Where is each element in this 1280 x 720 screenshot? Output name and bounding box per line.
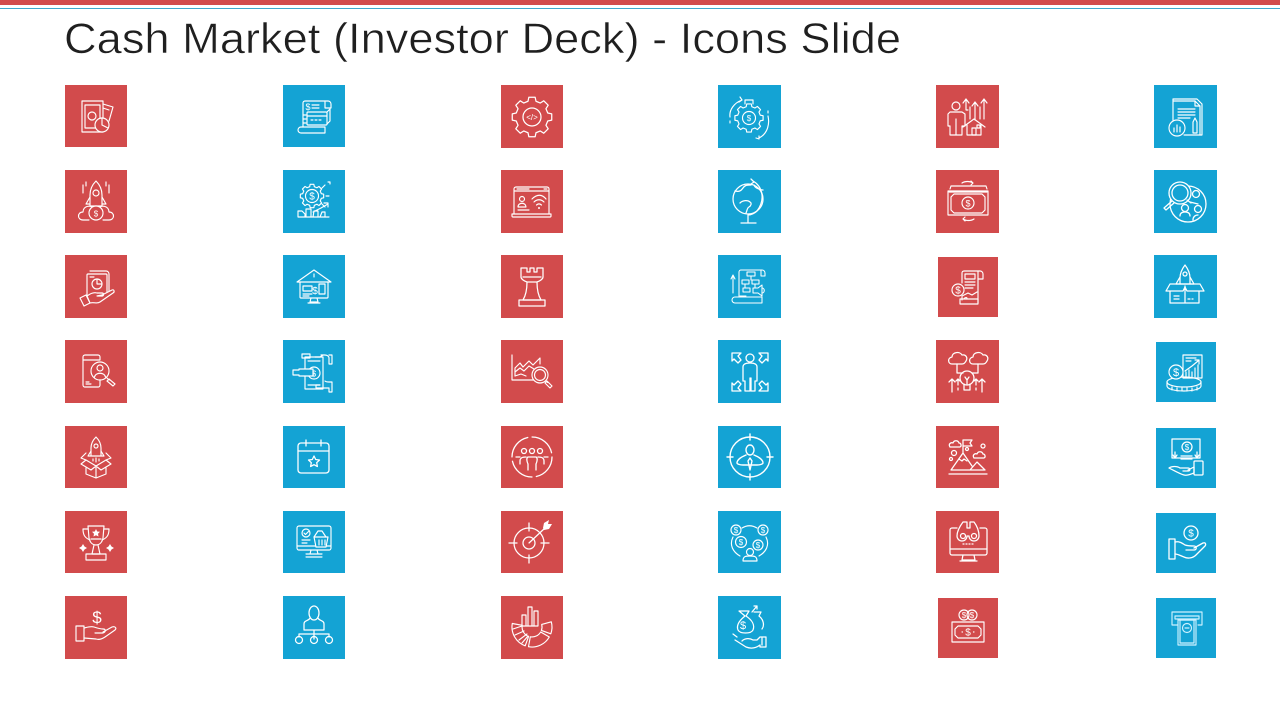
icon: cash with swap arrows: $ — [965, 198, 971, 208]
icon: cash bill with coins — [938, 598, 998, 658]
icon: hand receiving bill — [1156, 428, 1216, 488]
icon: team in circle — [501, 426, 563, 488]
icon: bank on monitor — [283, 255, 345, 318]
icon: globe on stand — [718, 170, 781, 233]
icon: hand holding report — [65, 255, 127, 318]
icon: document with chart badge — [1154, 85, 1217, 148]
icon: money bags on hand — [718, 596, 781, 659]
icon: hand with dollar — [65, 596, 127, 659]
icon: ATM cash slot — [1156, 598, 1216, 658]
icon: laptop with wifi — [501, 170, 563, 233]
icon: coins and person: $ — [734, 526, 739, 535]
icon: coins and person: $ — [739, 538, 744, 547]
icon: clouds and light bulb — [936, 340, 999, 403]
icon: person with hierarchy — [283, 596, 345, 659]
icon: hand holding coin — [1156, 513, 1216, 573]
top accent bar — [0, 0, 1280, 9]
icon: gear with code: </> — [526, 113, 538, 122]
icon: phone with magnifier on user — [65, 340, 127, 403]
icon: person with four arrows — [718, 340, 781, 403]
icon: coins and person: $ — [756, 541, 761, 550]
icon: target with dart — [501, 511, 563, 573]
icon: chart with magnifier — [501, 340, 563, 403]
icon: monitor with binoculars — [936, 511, 999, 573]
icon: coins and person: $ — [761, 526, 766, 535]
icon: magnifier over people globe — [1154, 170, 1217, 233]
icon: cash bill with coins: $ — [970, 611, 975, 620]
icon: rocket from open box — [1154, 255, 1217, 318]
icon: receipt with card: $ — [305, 102, 311, 112]
icon: hand receiving bill: $ — [1185, 443, 1190, 452]
icon: cash bill with coins: $ — [962, 611, 967, 620]
icon: rocket over clouds with coin — [65, 170, 127, 233]
icon: money bags on hand: $ — [740, 620, 746, 632]
icon: bank on monitor: $ — [312, 286, 318, 297]
icon: cash bill with coins: $ — [965, 628, 971, 638]
icon: rocket launching from box — [65, 426, 127, 488]
icon: dollar gear with charts — [283, 170, 345, 233]
icon: coins with growth chart — [1156, 342, 1216, 402]
icon: trophy — [65, 511, 127, 573]
icon: receipt with card — [283, 85, 345, 147]
icon: person in crosshair — [718, 426, 781, 488]
icon: cash with pie chart — [65, 85, 127, 147]
icon: donut chart with bars — [501, 596, 563, 659]
icon: mountains with flag — [936, 426, 999, 488]
icon: chess rook — [501, 255, 563, 318]
icon: stopwatch gear with dollar: $ — [747, 114, 752, 123]
icon: stopwatch gear with dollar — [718, 85, 781, 148]
icon: hands exchanging cash: $ — [312, 370, 317, 378]
icon: coins and person — [718, 511, 781, 573]
icon: dollar gear with charts: $ — [309, 192, 315, 202]
icon: monitor with shopping basket — [283, 511, 345, 573]
icon: hand with dollar: $ — [92, 608, 102, 627]
icon: gear with code — [501, 85, 563, 148]
icon: document with coin: $ — [955, 286, 961, 296]
title: Cash Market (Investor Deck) - Icons Slide — [64, 15, 901, 63]
icon: rocket over clouds with coin: $ — [94, 210, 99, 218]
icon: person with arrows and house — [936, 85, 999, 148]
icon: document with coin — [938, 257, 998, 317]
icon: hands exchanging cash — [283, 340, 345, 403]
icon: flowchart scroll — [718, 255, 781, 318]
icon: calendar with star — [283, 426, 345, 488]
icon: coins with growth chart: $ — [1173, 367, 1179, 379]
icon: cash with swap arrows — [936, 170, 999, 233]
icon: hand holding coin: $ — [1188, 528, 1194, 540]
